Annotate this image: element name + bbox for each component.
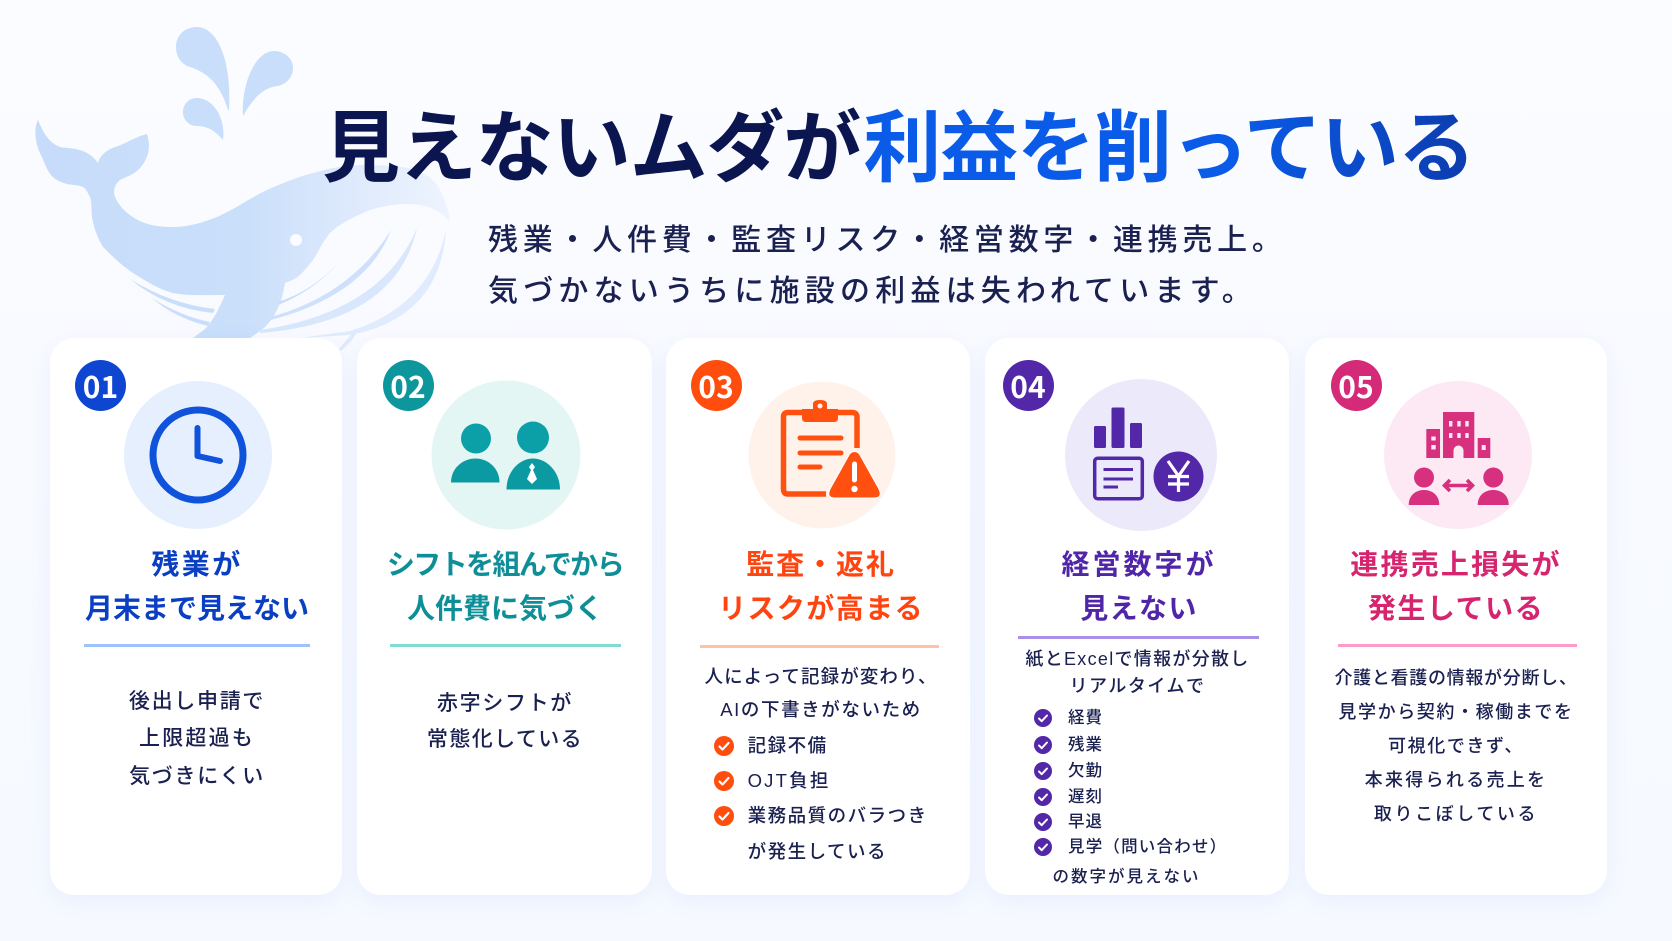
- panel: card 05 partnership revenue loss: 本来得られる売上を: [1365, 770, 1547, 790]
- item: [1034, 762, 1103, 780]
- item: [1034, 788, 1103, 806]
- panel: card 01 overtime: 気づきにくい: [129, 765, 265, 788]
- checklist: [1034, 708, 1227, 856]
- badge 03: 03: [698, 363, 734, 407]
- item: OJT負担: [748, 770, 831, 791]
- item: [1034, 708, 1103, 727]
- item: 記録不備: [748, 735, 828, 756]
- panel: card 04 management numbers: [985, 338, 1289, 895]
- badge 05: 05: [1338, 363, 1374, 407]
- panel: card 03 audit risk: リスクが高まる: [718, 593, 924, 624]
- panel: card 05 partnership revenue loss: 取りこぼしている: [1374, 804, 1538, 824]
- panel: card 04 management numbers: リアルタイムで: [1070, 676, 1205, 696]
- panel: card 02 shift cost: 常態化している: [427, 728, 583, 751]
- panel: card 01 overtime: 後出し申請で: [129, 690, 265, 713]
- panel: card 02 shift cost: 赤字シフトが: [437, 692, 573, 715]
- badge 02: 02: [390, 363, 426, 407]
- item: 残業: [1068, 736, 1103, 754]
- icon: chart, document and yen: [1065, 379, 1217, 531]
- item: [1034, 736, 1103, 754]
- body text: [129, 690, 265, 788]
- panel: card 04 management numbers: 紙とExcelで情報が分散し: [1025, 649, 1250, 669]
- panel: card 05 partnership revenue loss: 可視化できず、: [1388, 736, 1524, 756]
- body text: [1334, 668, 1578, 824]
- panel: card 04 management numbers: 経営数字が: [1061, 549, 1217, 580]
- panel: card 02 shift cost: [357, 338, 652, 895]
- panel: card 05 partnership revenue loss: 連携売上損失が: [1350, 549, 1562, 580]
- divider: [390, 644, 621, 647]
- badge 01: 01: [83, 363, 118, 407]
- subtitle: 残業・人件費・監査リスク・経営数字・連携売上。: [488, 224, 1287, 257]
- panel: card 02 shift cost: シフトを組んでから: [387, 549, 623, 580]
- whale illustration: [35, 27, 450, 351]
- panel: card 03 audit risk: 人によって記録が変わり、: [705, 666, 937, 687]
- panel: card 01 overtime: 月末まで見えない: [85, 593, 309, 624]
- item: 見学（問い合わせ）: [1068, 838, 1227, 856]
- badge 04: [1002, 360, 1054, 411]
- badge 03: [690, 360, 742, 411]
- item continuation: が発生している: [748, 841, 887, 862]
- checklist: [714, 735, 928, 862]
- panel: card 03 audit risk: 監査・返礼: [746, 549, 896, 580]
- body text: [705, 666, 937, 720]
- heading: [1061, 549, 1217, 624]
- body text: [1025, 649, 1250, 696]
- panel: card 03 audit risk: [666, 338, 970, 895]
- panel: card 05 partnership revenue loss: 見学から契約・稼働までを: [1338, 702, 1574, 722]
- closing text: の数字が見えない: [1052, 868, 1200, 886]
- divider: [1018, 636, 1259, 638]
- badge 02: [382, 360, 434, 411]
- badge 01: [75, 360, 126, 411]
- heading: [718, 549, 924, 624]
- heading: [1350, 549, 1562, 624]
- body text: [427, 692, 583, 751]
- subtitle: [488, 224, 1287, 308]
- divider: [84, 644, 310, 647]
- panel: card 03 audit risk: AIの下書きがないため: [720, 699, 922, 720]
- badge 05: [1330, 360, 1382, 411]
- item: 遅刻: [1068, 788, 1103, 806]
- panel: card 05 partnership revenue loss: 発生している: [1368, 593, 1544, 624]
- item: 業務品質のバラつき: [748, 805, 928, 826]
- panel: card 05 partnership revenue loss: 介護と看護の情報が分断し、: [1334, 668, 1578, 688]
- item: 早退: [1068, 813, 1103, 831]
- item: [1034, 813, 1103, 831]
- subtitle: 気づかないうちに施設の利益は失われています。: [488, 275, 1257, 308]
- panel: card 05 partnership revenue loss: [1305, 338, 1607, 895]
- panel: card 04 management numbers: 見えない: [1080, 593, 1198, 624]
- panel: card 01 overtime: 上限超過も: [139, 727, 255, 750]
- icon: clipboard warning: [748, 382, 896, 528]
- heading: [85, 549, 309, 624]
- panel: card 01 overtime: [50, 338, 342, 895]
- panel: card 02 shift cost: 人件費に気づく: [407, 593, 603, 624]
- title: 見えないムダが利益を削っている: [322, 104, 1475, 192]
- heading: [387, 549, 623, 624]
- divider: [1338, 644, 1576, 647]
- icon: buildings and people: [1384, 381, 1532, 529]
- item: 経費: [1068, 709, 1103, 727]
- badge 04: 04: [1010, 363, 1046, 407]
- icon: clock: [124, 381, 272, 529]
- divider: [700, 645, 939, 648]
- item: 欠勤: [1068, 762, 1103, 780]
- panel: card 01 overtime: 残業が: [151, 549, 243, 580]
- icon: two people: [432, 380, 580, 530]
